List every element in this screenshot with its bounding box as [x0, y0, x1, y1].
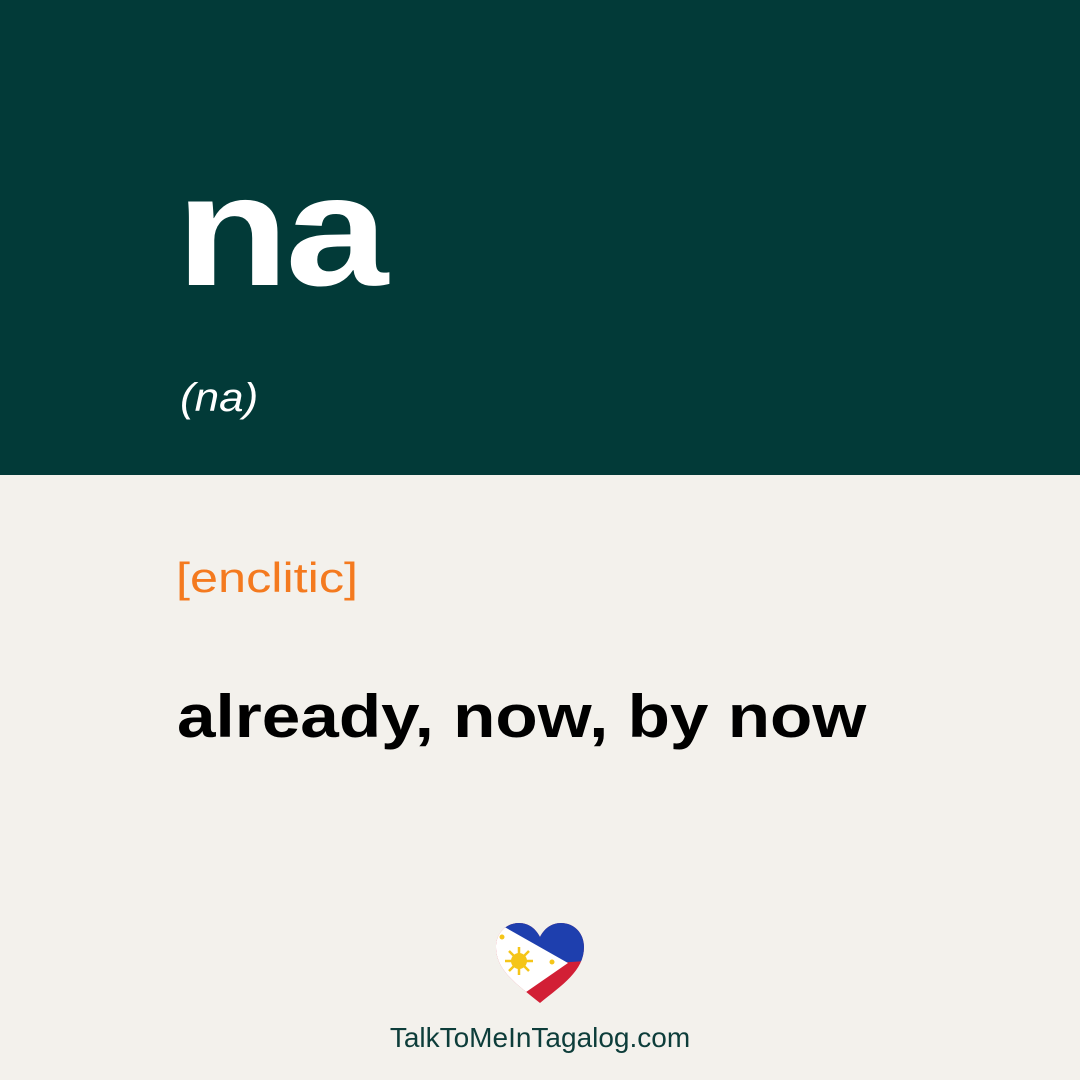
definition: already, now, by now	[177, 683, 866, 750]
part of speech: [enclitic]	[176, 554, 358, 601]
icon: philippine flag heart	[496, 923, 584, 1003]
footer website: TalkToMeInTagalog.com	[390, 1022, 690, 1053]
title word: na	[176, 143, 385, 319]
pronunciation: (na)	[180, 376, 258, 420]
header panel	[0, 0, 1080, 475]
